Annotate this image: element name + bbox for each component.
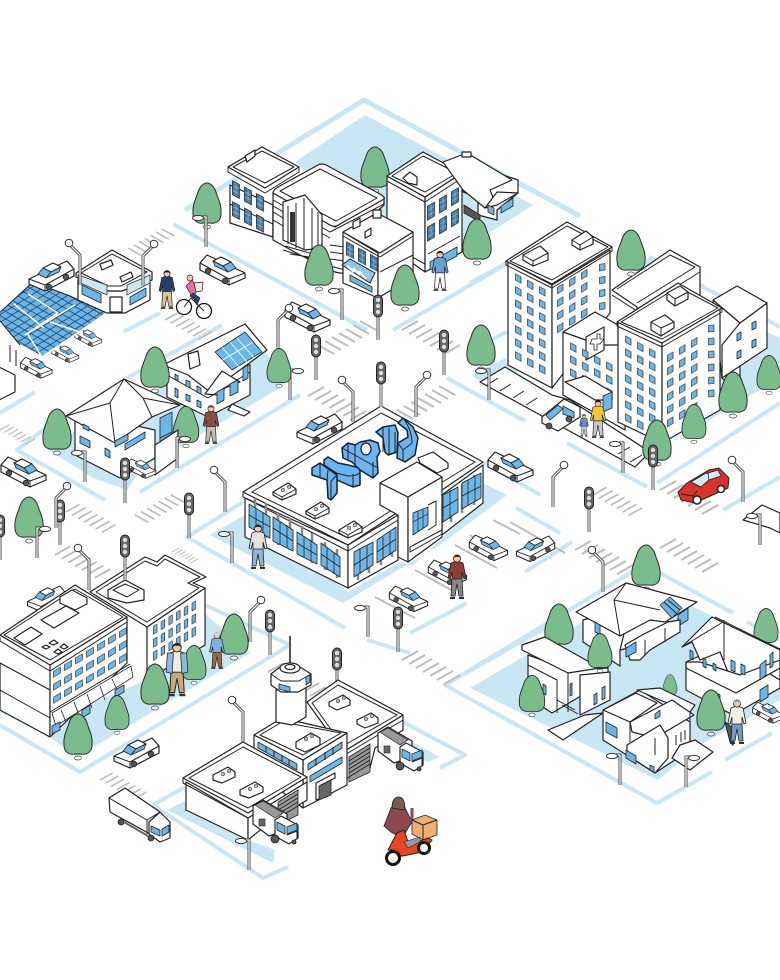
tree <box>43 409 71 455</box>
tree <box>64 714 92 760</box>
lamp <box>56 482 71 528</box>
back low block <box>612 250 700 360</box>
tree <box>643 420 671 466</box>
parking bay lines <box>375 520 565 618</box>
traffic light <box>332 648 342 693</box>
wall posts <box>255 475 474 580</box>
ground: blue block plazas and curbs <box>0 100 780 878</box>
person: woman in blue <box>432 251 448 291</box>
lamp <box>686 755 700 787</box>
rear right wall <box>442 465 483 535</box>
person: man in jeans <box>249 525 267 569</box>
traffic light <box>440 330 448 375</box>
white box building, far left <box>0 365 15 402</box>
scooter body <box>388 830 432 856</box>
roof box <box>418 452 448 473</box>
central hospital wing with cross <box>563 332 625 430</box>
control tower <box>276 688 306 725</box>
tree <box>141 347 169 393</box>
person: man in open shirt <box>166 643 188 696</box>
ambulance <box>542 399 580 431</box>
tree <box>588 633 612 673</box>
lamp <box>250 596 265 642</box>
traffic light <box>374 295 382 340</box>
tree <box>682 404 706 444</box>
building: left brownstone, north block <box>228 147 299 237</box>
person: man in navy <box>159 270 175 309</box>
lamp <box>192 215 206 247</box>
lamp <box>218 531 232 563</box>
tree <box>267 348 291 388</box>
tree <box>182 645 206 685</box>
tree <box>463 219 491 265</box>
tree <box>617 230 645 276</box>
traffic light <box>0 515 4 560</box>
tree <box>757 355 780 395</box>
station block ground <box>167 737 440 863</box>
right wing <box>343 715 403 780</box>
hospital complex <box>480 222 767 467</box>
house with hipped roof <box>66 379 180 478</box>
right low block <box>713 300 740 395</box>
centre block ground <box>210 483 507 603</box>
lamp <box>37 526 50 558</box>
lamp <box>236 838 249 870</box>
lamp <box>606 753 620 785</box>
cargo box <box>412 815 437 840</box>
person: adult in yellow <box>590 400 606 438</box>
traffic light <box>312 335 320 380</box>
north block ground <box>295 115 533 245</box>
fire truck, right bay <box>378 727 423 771</box>
person: man with bicycle <box>725 700 746 745</box>
south-east houses <box>519 545 780 787</box>
tree <box>519 675 545 717</box>
front tower <box>618 322 662 443</box>
tree <box>305 245 333 291</box>
upper house <box>576 583 697 666</box>
station complex <box>183 636 403 840</box>
lamp <box>210 466 225 512</box>
lamp <box>74 544 89 590</box>
lamp <box>228 696 243 742</box>
left tower <box>508 262 552 388</box>
lamp <box>416 371 431 417</box>
traffic light <box>184 493 194 538</box>
lamp <box>65 239 80 285</box>
south-west department store <box>0 585 133 737</box>
left wing <box>186 782 248 840</box>
lamp <box>354 605 368 637</box>
lamp <box>610 441 623 473</box>
cars under the solar carport <box>21 329 102 378</box>
traffic light <box>584 487 594 532</box>
lamp <box>177 436 190 468</box>
building: small corner shop with awning <box>342 210 413 298</box>
lamp <box>338 376 353 422</box>
tower window <box>413 507 428 535</box>
vents <box>273 483 296 500</box>
north block curb <box>185 100 580 216</box>
lamp <box>278 304 293 350</box>
south-west block ground <box>0 612 250 757</box>
tree <box>105 695 129 735</box>
mid-left block ground <box>45 345 285 490</box>
tree behind <box>545 604 573 650</box>
central building <box>243 406 483 588</box>
antenna <box>289 636 291 672</box>
person: pedestrian with backpack <box>210 632 224 669</box>
roof <box>243 406 483 545</box>
tree behind <box>754 608 778 648</box>
tree <box>15 497 43 543</box>
lamp <box>553 461 568 507</box>
south-east block ground <box>470 600 780 780</box>
parking lot <box>480 367 650 467</box>
rooftop 3D logo <box>312 418 418 500</box>
fire truck, left bay <box>253 800 298 844</box>
lamp <box>328 288 342 320</box>
traffic light <box>648 445 658 490</box>
tree <box>220 614 248 660</box>
tree <box>467 325 495 371</box>
traffic light <box>120 535 130 580</box>
tower right face <box>408 477 442 562</box>
lamp <box>588 546 603 592</box>
tower top <box>380 462 442 497</box>
cyclist <box>176 275 212 318</box>
traffic light <box>56 500 64 545</box>
traffic light <box>120 458 130 503</box>
rider <box>384 804 412 838</box>
tree behind <box>632 545 660 591</box>
building: tall brownstone right <box>387 152 462 272</box>
traffic light <box>266 610 274 655</box>
house with gable roof, north block <box>443 152 518 222</box>
traffic light <box>394 607 402 652</box>
scooter rider <box>384 797 437 864</box>
curbs <box>0 224 780 878</box>
glazed panels <box>249 473 481 577</box>
tree <box>173 406 199 448</box>
delivery truck <box>109 788 170 842</box>
lamp <box>476 368 489 400</box>
middle section <box>303 733 347 808</box>
person: child <box>580 414 588 436</box>
car under carport <box>127 459 156 478</box>
right wing wall <box>348 515 398 588</box>
house with solar roof <box>163 324 267 417</box>
left wall <box>245 498 348 588</box>
traffic light <box>376 362 386 407</box>
tree <box>697 690 725 736</box>
red car <box>678 468 729 504</box>
tower left face <box>380 483 408 562</box>
person: woman with long hair <box>448 555 466 599</box>
tree behind <box>663 674 677 698</box>
modern house <box>603 688 713 773</box>
tree <box>391 265 419 311</box>
lamp <box>728 456 743 502</box>
lamp <box>72 450 85 482</box>
small roof at road edge <box>743 505 780 533</box>
tree <box>719 372 747 418</box>
car <box>753 702 780 723</box>
building: rounded-corner theatre <box>273 164 384 273</box>
tree <box>361 147 389 193</box>
lamp <box>143 240 158 286</box>
solar carport <box>0 282 107 366</box>
south-west office building rear <box>90 555 206 680</box>
crosswalks <box>0 229 718 799</box>
person: man in brown jacket <box>203 405 219 444</box>
hospital block ground <box>472 255 780 443</box>
corner shop <box>76 250 152 313</box>
left house <box>522 637 610 740</box>
cars <box>1 255 555 768</box>
tree <box>141 664 169 710</box>
tree <box>193 183 221 229</box>
right house <box>682 617 780 715</box>
lamp <box>746 513 760 545</box>
lamp <box>290 368 304 400</box>
